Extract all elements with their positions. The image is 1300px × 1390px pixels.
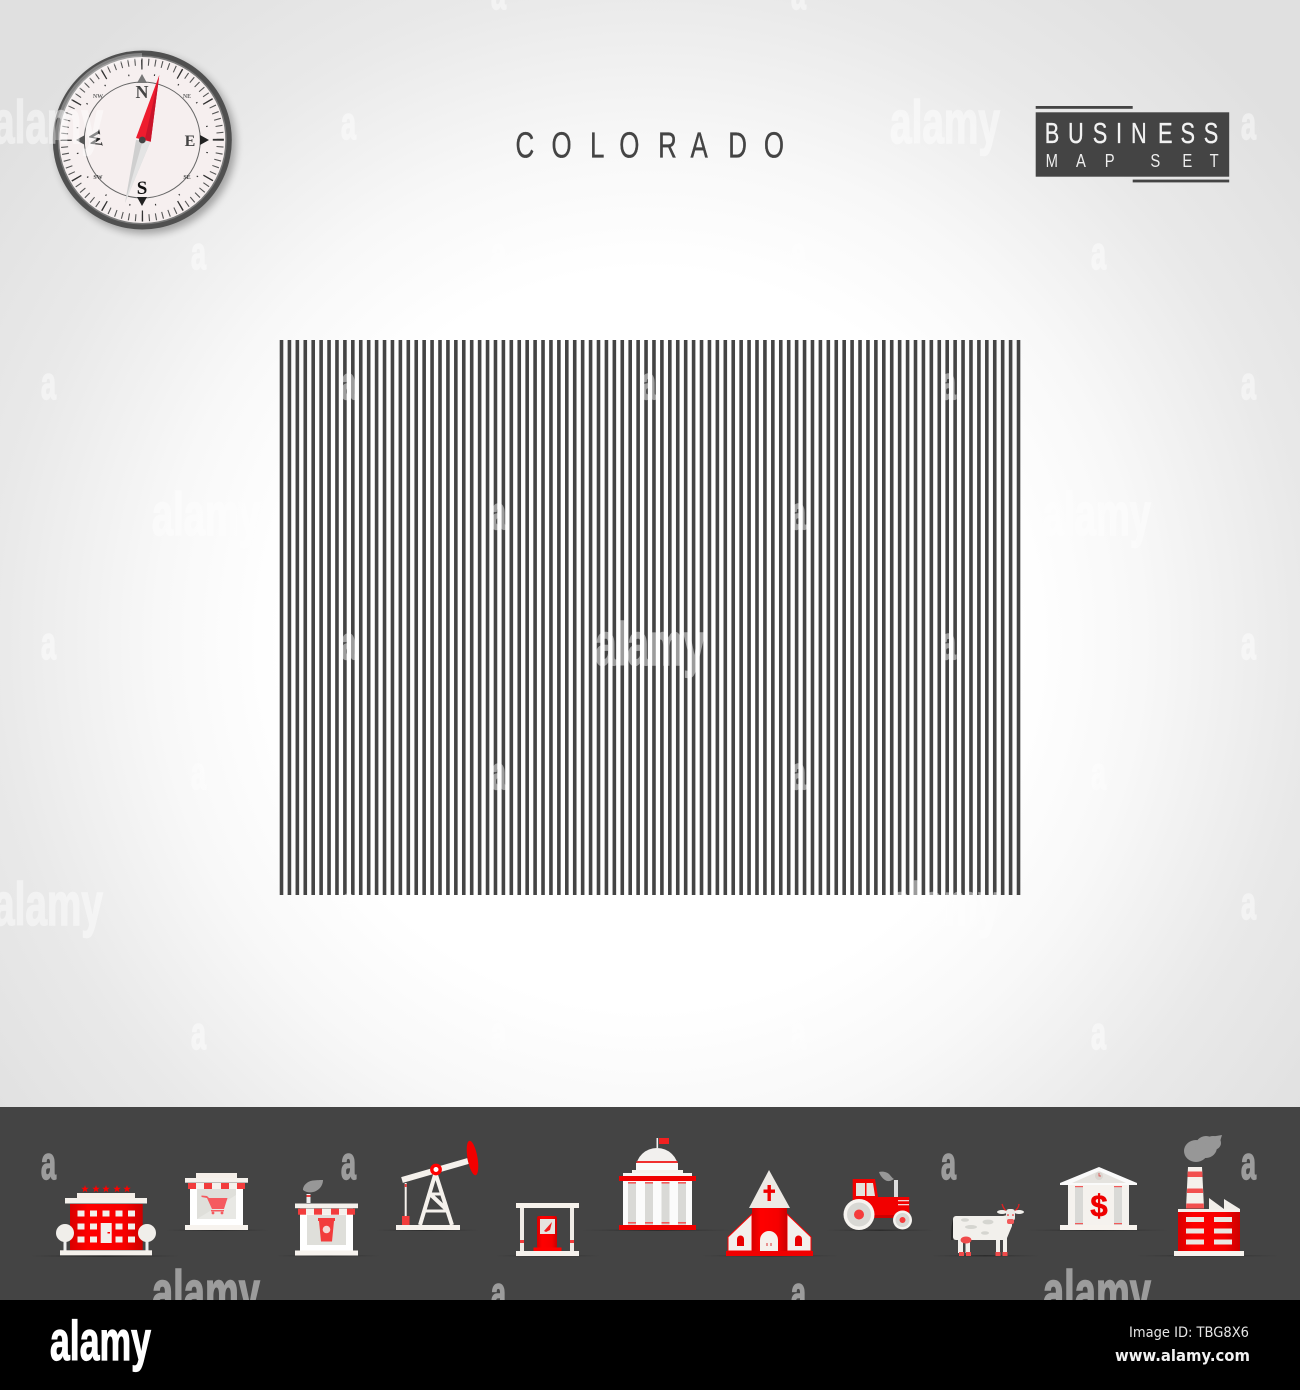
badge line one: BUSINESS — [1045, 118, 1218, 150]
factory icon — [1135, 1135, 1280, 1256]
bottom icon band background — [0, 1107, 1300, 1300]
compass letters: NE — [183, 94, 191, 100]
alamy watermarks: a — [941, 1137, 956, 1189]
shopping cart — [202, 1196, 228, 1214]
hotel icon — [30, 1185, 180, 1257]
alamy watermarks: alamy — [1043, 481, 1151, 548]
alamy watermarks: a — [791, 487, 806, 539]
alamy watermarks: alamy — [152, 1259, 260, 1326]
bank icon — [1025, 1167, 1170, 1231]
factory smoke cloud — [1184, 1135, 1222, 1162]
alamy watermarks: a — [191, 227, 206, 279]
alamy watermarks: alamy — [890, 89, 1000, 156]
coffee cup — [318, 1218, 335, 1242]
alamy watermarks: a — [491, 747, 506, 799]
alamy watermarks: a — [641, 357, 656, 409]
capitol building icon — [580, 1138, 735, 1231]
alamy watermarks: alamy — [1043, 1259, 1151, 1326]
title: COLORADO — [516, 126, 784, 166]
compass needle — [125, 75, 159, 203]
alamy watermarks: a — [491, 1007, 506, 1059]
compass letters: SW — [93, 175, 103, 181]
alamy watermarks: a — [1091, 747, 1106, 799]
alamy watermarks: a — [1241, 97, 1256, 149]
compass letters — [84, 82, 195, 199]
alamy watermarks: a — [1091, 1007, 1106, 1059]
alamy watermarks: a — [341, 357, 356, 409]
compass letters: NW — [93, 94, 103, 100]
alamy watermarks: alamy — [595, 611, 705, 678]
business map set badge — [1036, 106, 1229, 182]
background vignette — [0, 0, 1300, 1107]
badge line two: MAP SET — [1046, 150, 1219, 171]
alamy watermarks: alamy — [890, 871, 1000, 938]
website url: www.alamy.com — [1115, 1346, 1250, 1365]
compass cardinal triangles — [76, 74, 209, 206]
compass letters: S — [137, 178, 147, 199]
shopping store icon — [165, 1173, 270, 1231]
oil pumpjack icon — [375, 1140, 480, 1231]
alamy watermarks: a — [191, 1007, 206, 1059]
alamy watermarks: a — [791, 1267, 806, 1319]
compass letters: N — [136, 82, 148, 102]
alamy watermarks: a — [1091, 227, 1106, 279]
alamy watermarks: a — [791, 747, 806, 799]
tractor icon — [825, 1172, 935, 1231]
alamy watermarks: a — [1241, 1137, 1256, 1189]
cow icon — [930, 1204, 1040, 1256]
alamy watermarks: a — [941, 357, 956, 409]
alamy watermarks: a — [341, 1137, 356, 1189]
coffee shop icon — [275, 1180, 380, 1256]
alamy watermarks: a — [491, 1267, 506, 1319]
alamy watermarks: a — [491, 487, 506, 539]
compass — [53, 50, 236, 234]
compass letters: E — [185, 133, 195, 150]
tractor wheels — [844, 1199, 912, 1230]
alamy watermarks: a — [791, 1007, 806, 1059]
compass highlight — [55, 53, 142, 140]
gas station icon — [495, 1203, 600, 1256]
dollar sign: $ — [1090, 1188, 1108, 1223]
image id: Image ID: TBG8X6 — [1129, 1325, 1249, 1341]
alamy watermarks: a — [941, 617, 956, 669]
alamy watermarks: alamy — [152, 481, 260, 548]
alamy watermarks: a — [1241, 357, 1256, 409]
compass letters: SE — [183, 175, 191, 181]
alamy watermarks: a — [791, 227, 806, 279]
compass letters: W — [84, 129, 106, 149]
alamy watermarks: a — [1241, 877, 1256, 929]
vertical stripes map of Colorado — [280, 340, 1021, 895]
church icon — [700, 1170, 840, 1256]
alamy watermarks: a — [341, 97, 356, 149]
alamy watermarks: a — [341, 617, 356, 669]
footer alamy logo: alamy — [50, 1309, 151, 1372]
footer bar — [0, 1300, 1300, 1390]
alamy watermarks: a — [41, 1137, 56, 1189]
alamy watermarks: a — [41, 617, 56, 669]
alamy watermarks: a — [341, 877, 356, 929]
alamy watermarks: a — [491, 227, 506, 279]
alamy watermarks: a — [1241, 617, 1256, 669]
alamy watermarks: a — [41, 357, 56, 409]
alamy watermarks: a — [191, 747, 206, 799]
